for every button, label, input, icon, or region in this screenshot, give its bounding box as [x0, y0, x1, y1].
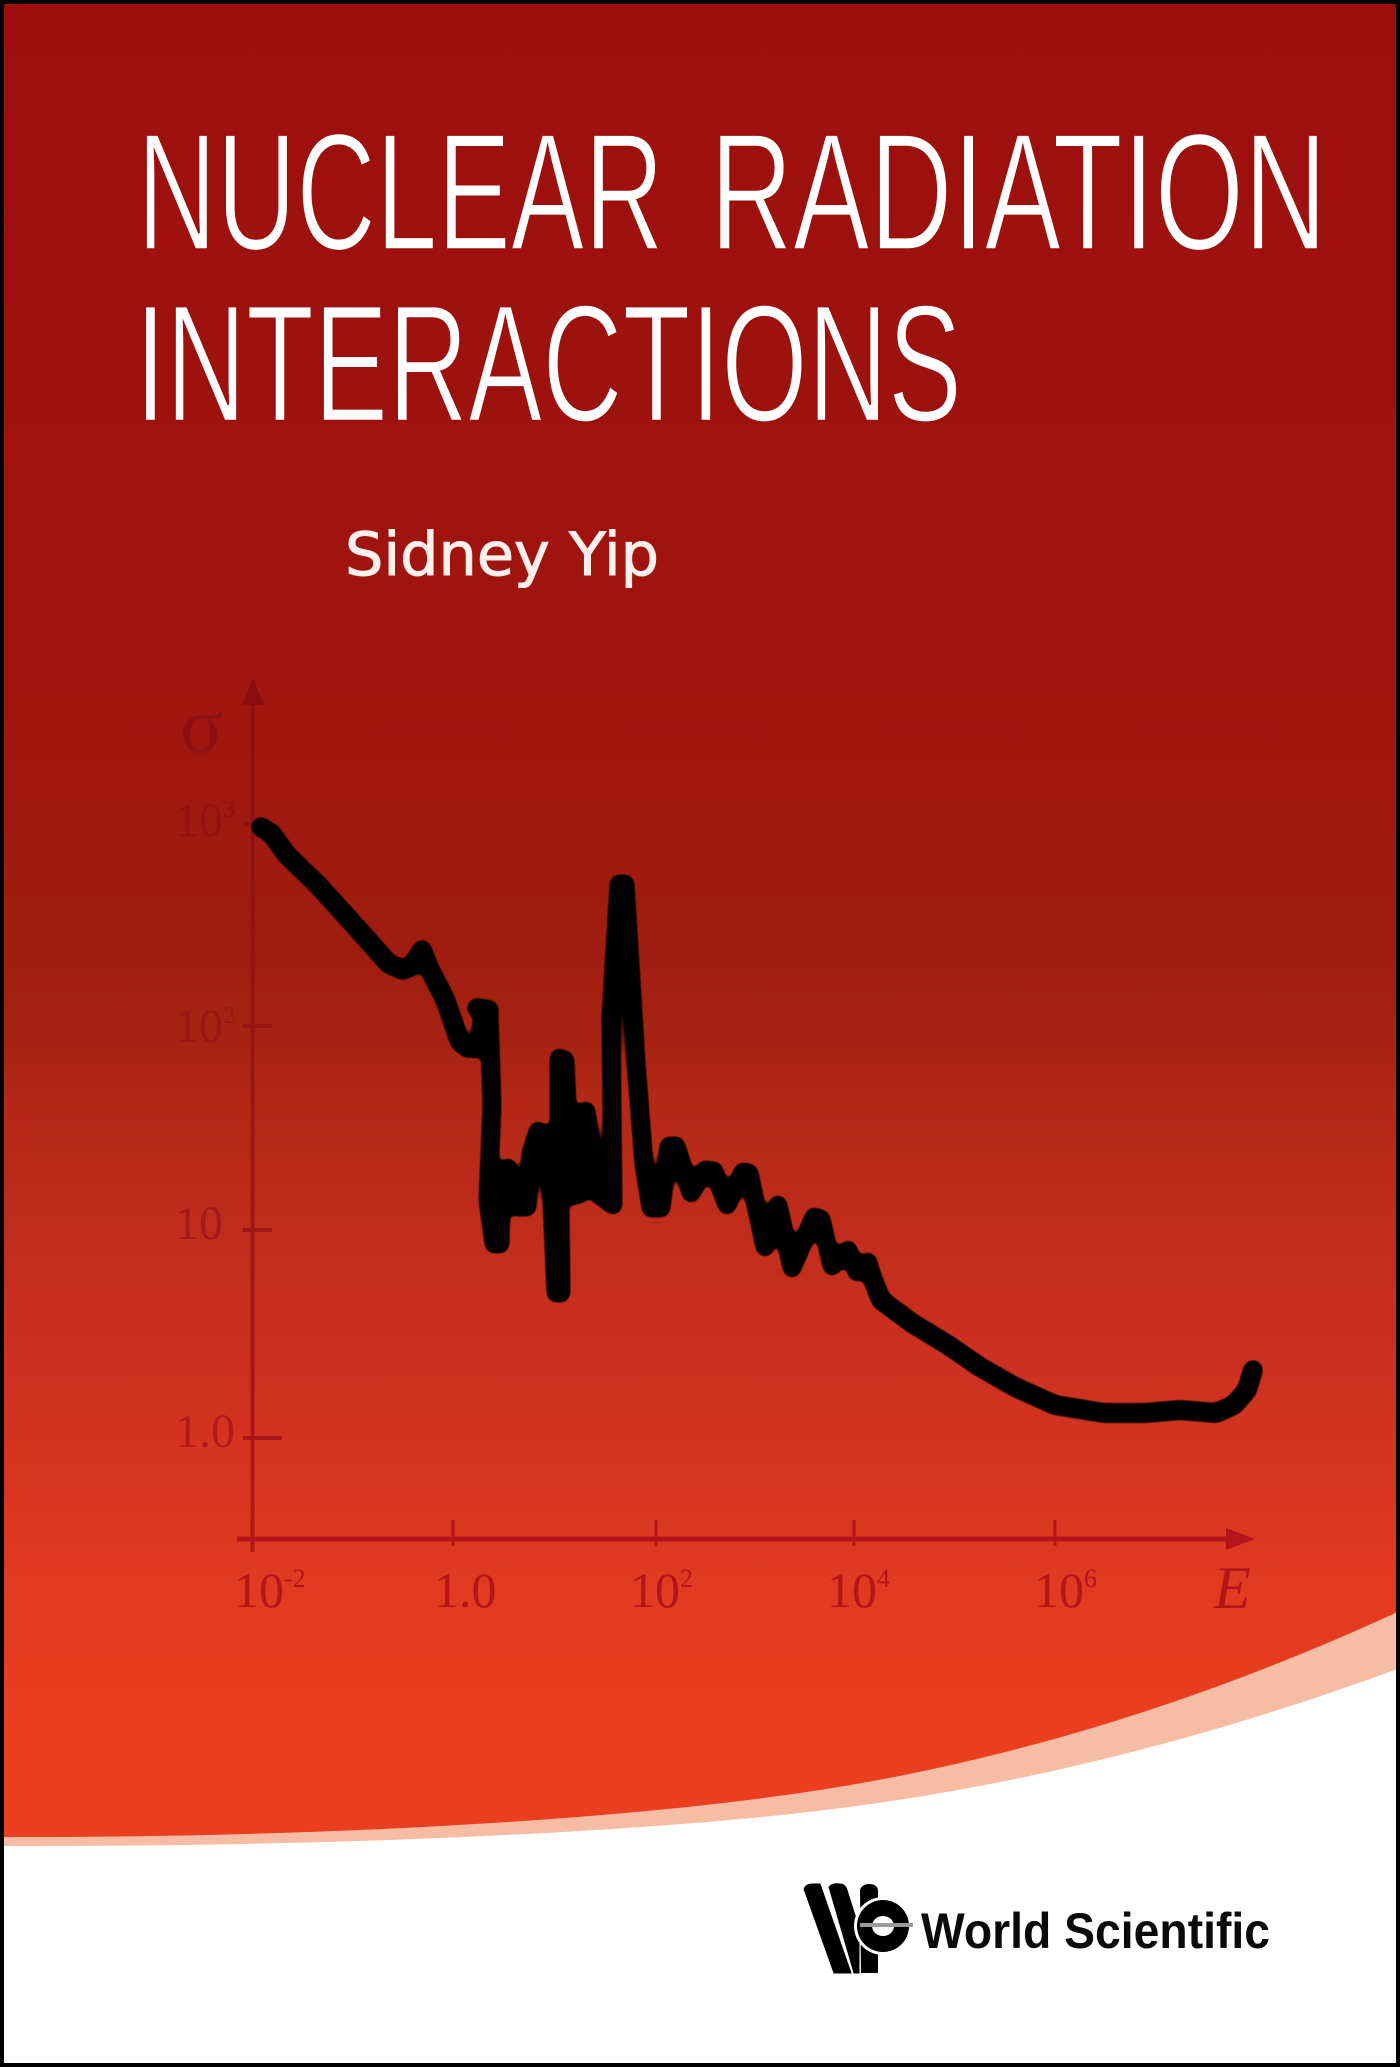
y axis labels: 1.0 [175, 1405, 235, 1458]
pale swoosh band under the red panel [0, 1500, 1400, 1846]
y axis with arrow and ticks [242, 678, 282, 1552]
x axis labels: 1.0 [434, 1562, 496, 1618]
y axis labels: σ [180, 682, 223, 770]
x axis labels: 10 [1034, 1562, 1084, 1618]
x axis labels: 10 [827, 1562, 877, 1618]
y axis labels: 10 [175, 1197, 223, 1250]
y axis labels: 3 [223, 797, 235, 823]
publisher logo [804, 1884, 1270, 1973]
y axis labels: 10 [175, 794, 223, 847]
x axis labels: 6 [1084, 1564, 1097, 1593]
y axis labels: 2 [223, 1003, 235, 1029]
x axis labels: 10 [630, 1562, 680, 1618]
title [135, 100, 1327, 457]
x axis labels: -2 [284, 1564, 306, 1593]
logo mark [804, 1884, 913, 1973]
x axis labels: 2 [680, 1564, 693, 1593]
x axis labels: E [1213, 1555, 1251, 1621]
x axis with arrow and ticks [237, 1520, 1255, 1550]
publisher name: World Scientific [921, 1903, 1270, 1959]
black cross-section curve [261, 827, 1253, 1413]
y axis labels [175, 682, 235, 1458]
title: NUCLEAR [137, 100, 664, 286]
x axis labels [234, 1555, 1251, 1621]
chart: cross-section versus energy [175, 678, 1255, 1621]
y axis labels: 10 [175, 1000, 223, 1053]
title: INTERACTIONS [135, 271, 962, 457]
x axis labels: 10 [234, 1562, 284, 1618]
x axis labels: 4 [877, 1564, 890, 1593]
author name: Sidney Yip [345, 520, 659, 590]
